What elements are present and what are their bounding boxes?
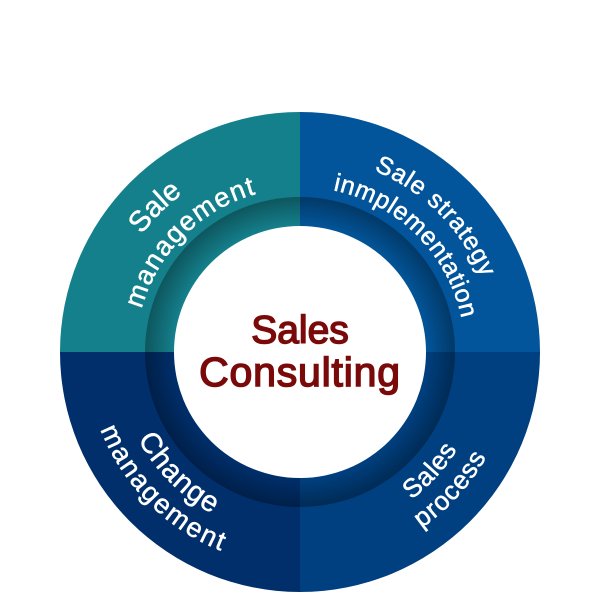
- center circle: [174, 226, 426, 478]
- label: sales: Sales: [403, 444, 456, 498]
- segment: sale strategy implementation: [300, 112, 540, 352]
- segment: sale management: [60, 112, 300, 352]
- segment: sale management: management: [128, 178, 256, 308]
- center title: Consulting: [199, 349, 401, 395]
- label: sale management: Sale: [129, 184, 180, 232]
- center title: [199, 309, 401, 395]
- segment: change management: [60, 352, 300, 592]
- label: sale strategy: Sale strategy: [376, 156, 494, 273]
- segment: sales process: process: [414, 452, 485, 532]
- segment: sale strategy implementation: inmplementation: [334, 172, 474, 318]
- segment: sales process: [300, 352, 540, 592]
- segment: change management: management: [100, 424, 226, 551]
- label: change: Change: [141, 433, 217, 512]
- center title: Sales: [251, 309, 349, 352]
- inner shadow ring: [145, 197, 455, 507]
